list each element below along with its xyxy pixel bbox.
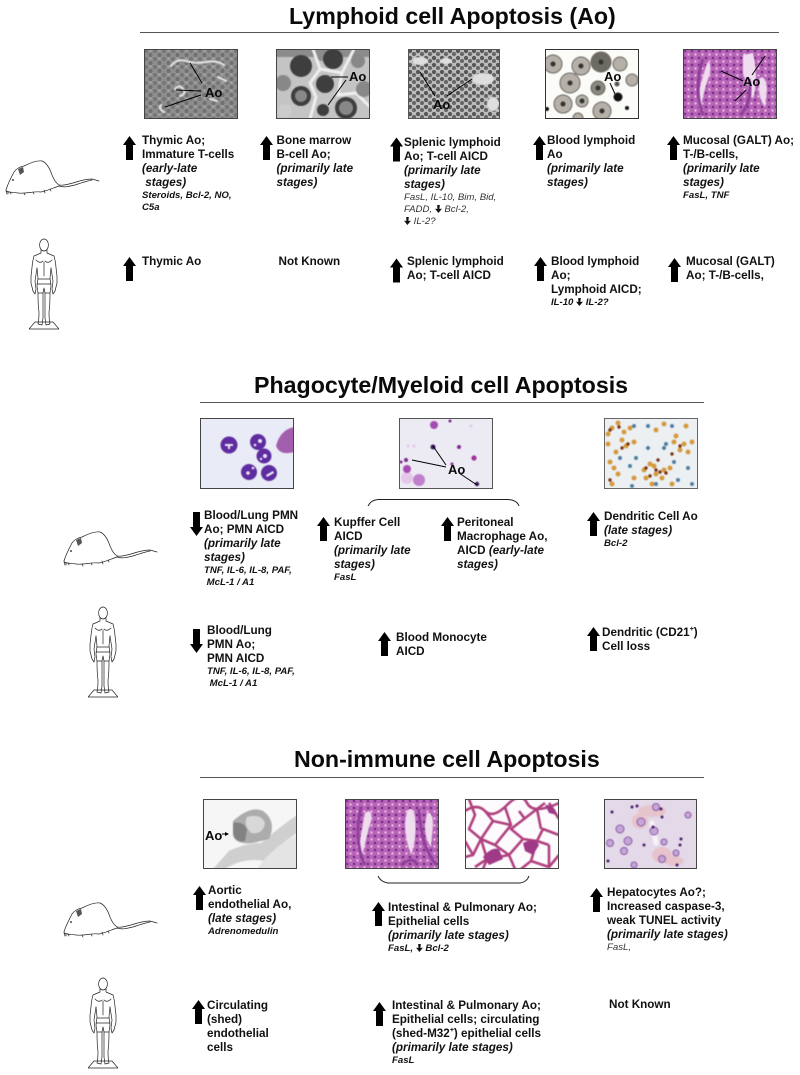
icon: human xyxy=(29,238,59,330)
text: Kupffer rat: FasL xyxy=(334,572,356,583)
text: thymic human: Thymic Ao xyxy=(142,255,201,268)
heading rule xyxy=(200,777,704,778)
micrograph: intestine xyxy=(345,799,439,869)
text: endothelial human: Circulating (shed) endothelial cells xyxy=(207,999,269,1054)
icon: rat xyxy=(58,901,158,941)
micrograph: blood lymphocytes xyxy=(545,49,639,119)
micrograph: bone marrow xyxy=(276,49,370,119)
text: Kupffer rat: Kupffer Cell AICD (primarily late stages) xyxy=(334,516,411,571)
text: PMN human xyxy=(207,624,295,689)
text: monocyte human: Blood Monocyte AICD xyxy=(396,631,487,658)
arrow up xyxy=(372,902,385,926)
arrow down xyxy=(190,512,203,536)
micrograph: neutrophils xyxy=(200,418,294,489)
arrow up xyxy=(260,136,273,160)
micrograph: lung xyxy=(465,799,559,869)
icon: human xyxy=(88,977,118,1069)
arrow up xyxy=(390,258,403,282)
text: dendritic rat: Bcl-2 xyxy=(604,538,627,549)
text: splenic rat xyxy=(404,136,501,227)
heading: lymphoid: Lymphoid cell Apoptosis (Ao) xyxy=(289,3,616,29)
text: aortic rat: Adrenomedulin xyxy=(208,926,278,937)
text: PMN rat xyxy=(204,509,298,588)
arrow up xyxy=(590,888,603,912)
text: intestinal rat: Intestinal & Pulmonary Ao; Epithelial cells (primarily late stages) xyxy=(388,901,537,942)
text: bone marrow rat: Bone marrow B-cell Ao; (primarily late stages) xyxy=(276,134,353,189)
heading rule xyxy=(200,402,704,403)
micrograph: GALT mucosa xyxy=(683,49,777,119)
text: blood lymphoid rat: Blood lymphoid Ao (primarily late stages) xyxy=(547,134,635,189)
arrow up xyxy=(668,258,681,282)
brace xyxy=(376,874,532,885)
arrow up xyxy=(587,512,600,536)
text: hepatocytes rat: FasL, xyxy=(607,942,631,953)
arrow down xyxy=(190,629,203,653)
arrow up xyxy=(193,886,206,910)
text: dendritic rat xyxy=(604,510,698,549)
arrow up xyxy=(441,517,454,541)
text: hepatocytes human: Not Known xyxy=(609,998,671,1011)
text: PMN human: TNF, IL-6, IL-8, PAF, McL-1 / A1 xyxy=(207,666,295,689)
micrograph: spleen: Ao xyxy=(433,97,450,112)
arrow up xyxy=(192,1000,205,1024)
text: hepatocytes rat: Hepatocytes Ao?; Increased caspase-3, weak TUNEL activity (primarily late stages) xyxy=(607,886,728,941)
arrow up xyxy=(123,136,136,160)
micrograph: macrophages xyxy=(399,418,493,489)
text: dendritic rat: Dendritic Cell Ao (late stages) xyxy=(604,510,698,537)
panel: phagocyte/myeloid cell apoptosis xyxy=(64,372,704,698)
panel: non-immune cell apoptosis xyxy=(0,745,800,1075)
micrograph: GALT mucosa: Ao xyxy=(743,74,760,89)
micrograph: macrophages: Ao xyxy=(448,462,465,477)
heading: non-immune: Non-immune cell Apoptosis xyxy=(294,746,600,772)
micrograph: hepatocytes xyxy=(604,799,697,869)
text: splenic rat: Splenic lymphoid Ao; T-cell AICD (primarily late stages) xyxy=(404,136,501,191)
text: thymic rat: Thymic Ao; Immature T-cells (early-late stages) xyxy=(142,134,234,189)
arrow up xyxy=(534,257,547,281)
arrow up xyxy=(317,517,330,541)
text: splenic human: Splenic lymphoid Ao; T-cell AICD xyxy=(407,255,504,282)
text: splenic rat: FasL, IL-10, Bim, Bid, FADD, Bcl-2, IL-2? xyxy=(404,192,496,227)
icon: rat xyxy=(6,160,100,196)
text: PMN rat: Blood/Lung PMN Ao; PMN AICD (primarily late stages) xyxy=(204,509,298,564)
text: blood lymphoid human: Blood lymphoid Ao; Lymphoid AICD; xyxy=(551,255,642,296)
arrow up xyxy=(587,627,600,651)
text: mucosal rat: FasL, TNF xyxy=(683,190,729,201)
micrograph: aortic endothelium xyxy=(203,799,297,869)
icon: human xyxy=(88,606,118,698)
micrograph: dendritic cells xyxy=(604,418,698,489)
micrograph: blood lymphocytes: Ao xyxy=(604,69,621,84)
icon: rat xyxy=(64,532,158,566)
heading: phagocyte: Phagocyte/Myeloid cell Apoptosis xyxy=(254,372,628,398)
text: thymic rat xyxy=(142,134,234,213)
text: PMN human: Blood/Lung PMN Ao; PMN AICD xyxy=(207,624,272,665)
text: intestinal human: Intestinal & Pulmonary Ao; Epithelial cells; circulating (shed-M32+) epithelial cells (primarily late stages) xyxy=(392,999,541,1054)
text: PMN rat: TNF, IL-6, IL-8, PAF, McL-1 / A1 xyxy=(204,565,292,588)
micrograph: aortic endothelium: Ao xyxy=(205,828,222,843)
brace xyxy=(368,499,520,506)
text: thymic rat: Steroids, Bcl-2, NO, C5a xyxy=(142,190,232,213)
panel: lymphoid cell apoptosis xyxy=(6,3,794,330)
arrow up xyxy=(667,136,680,160)
text: aortic rat: Aortic endothelial Ao, (late stages) xyxy=(208,884,291,925)
micrograph: bone marrow: Ao xyxy=(349,69,366,84)
text: peritoneal rat: Peritoneal Macrophage Ao, AICD (early-late stages) xyxy=(457,516,547,571)
text: mucosal human: Mucosal (GALT) Ao; T-/B-cells, xyxy=(686,255,775,282)
text: dendritic human: Dendritic (CD21+) Cell loss xyxy=(602,626,698,653)
text: mucosal rat: Mucosal (GALT) Ao; T-/B-cells, (primarily late stages) xyxy=(683,134,794,189)
arrow up xyxy=(123,257,136,281)
micrograph: thymus: Ao xyxy=(205,85,222,100)
arrow up xyxy=(373,1002,386,1026)
arrow up xyxy=(390,138,403,162)
text: blood lymphoid human: IL-10 IL-2? xyxy=(551,297,609,308)
text: bone marrow human: Not Known xyxy=(278,255,340,268)
arrow up xyxy=(378,632,391,656)
micrograph: thymus xyxy=(144,49,238,119)
heading rule xyxy=(140,32,779,33)
micrograph: spleen xyxy=(408,49,500,119)
text: intestinal human: FasL xyxy=(392,1055,414,1066)
arrow up xyxy=(533,136,546,160)
text: intestinal rat: FasL, Bcl-2 xyxy=(388,943,449,954)
